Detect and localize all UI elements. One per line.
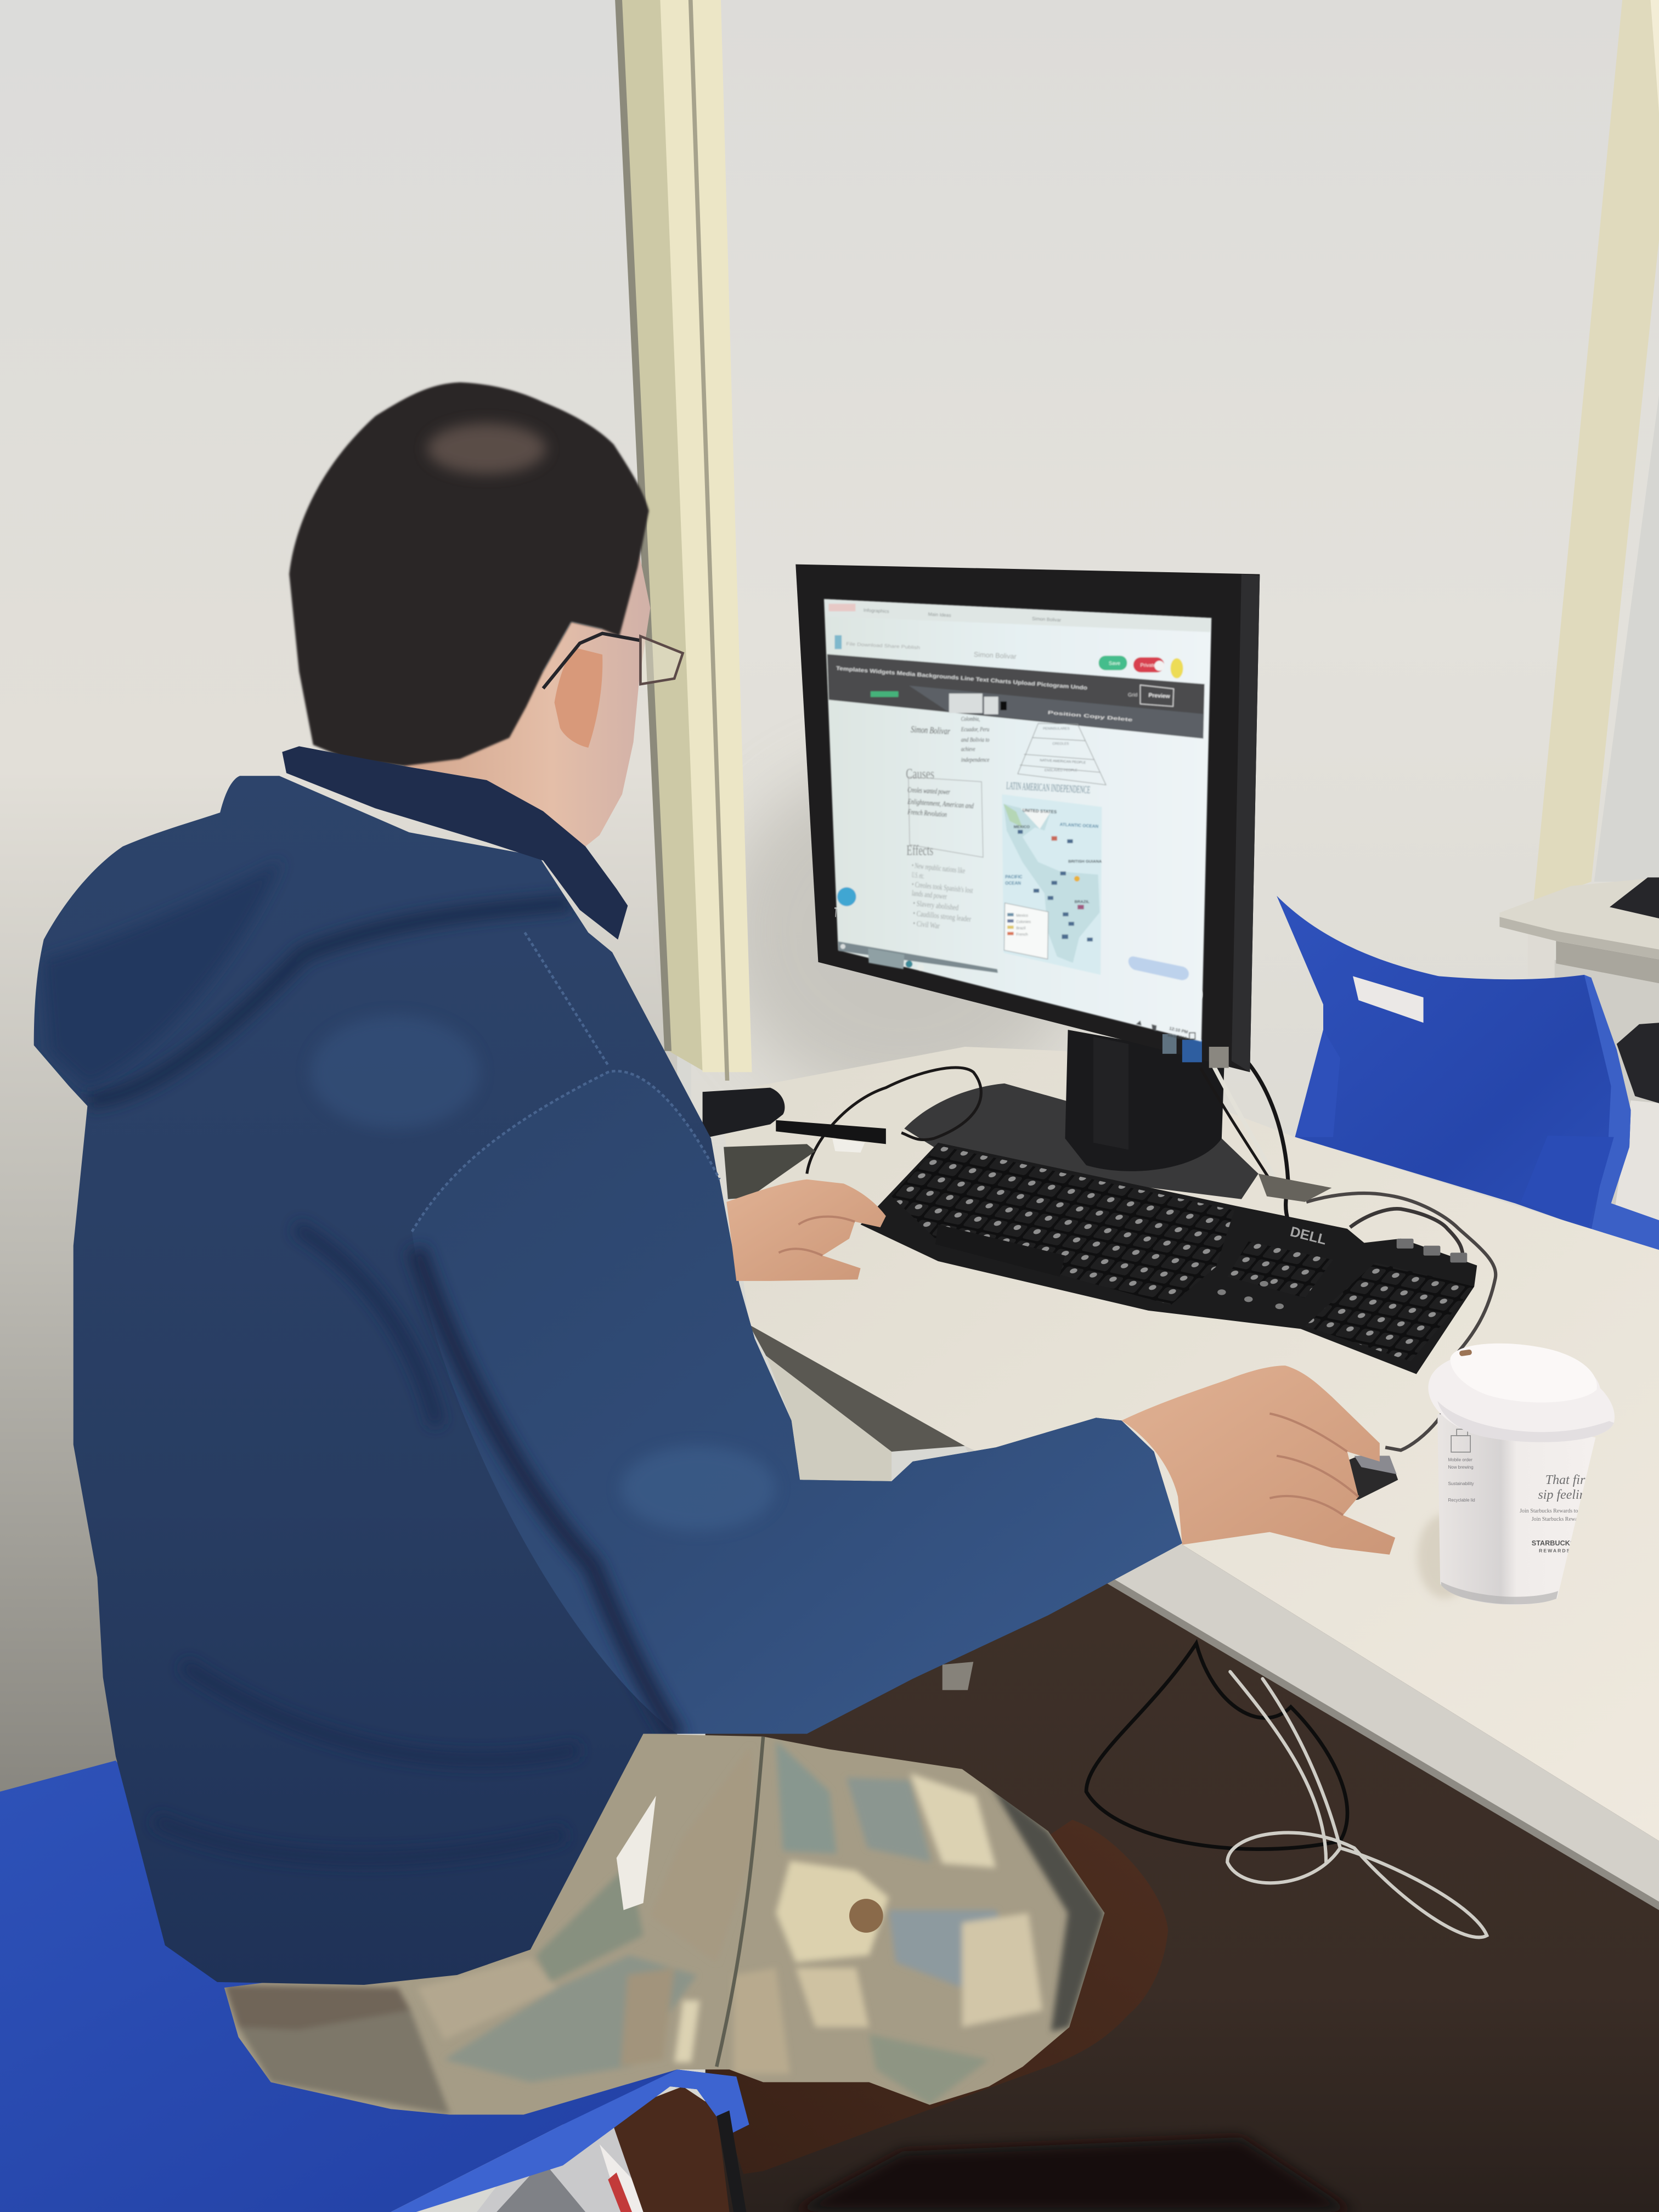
right door frame [1533, 0, 1659, 903]
effects bullet list: • New republic nations like [911, 861, 966, 876]
screen content [824, 599, 1211, 1042]
sneaker and sock [477, 2121, 663, 2212]
document text column left: Effects [906, 842, 933, 859]
pyramid diagram: CREOLES [1052, 742, 1069, 746]
camouflage shorts [212, 1721, 1114, 2123]
cup shadow [1418, 1514, 1472, 1598]
monitor bezel [795, 565, 1260, 1072]
monitor [795, 565, 1260, 1072]
monitor stand [904, 1030, 1259, 1199]
cup print: Join Starbucks Rewards [1532, 1516, 1584, 1522]
dark floor shadow [790, 2137, 1355, 2212]
editor toolbar: Preview [1148, 692, 1171, 700]
map legend: Mexico [1016, 914, 1028, 918]
document text column left: Simon Bolivar [911, 724, 951, 737]
DELL logo: DELL [1289, 1224, 1328, 1248]
app header: File Download Share Publish [846, 641, 921, 650]
cup print: Now brewing [1448, 1465, 1474, 1470]
shoulder seams [412, 933, 719, 1232]
coffee cup [1418, 1344, 1615, 1605]
screen background [824, 599, 1211, 1042]
cup print: That first [1545, 1473, 1595, 1487]
cup print: Join Starbucks Rewards today [1520, 1508, 1586, 1514]
pyramid diagram: ENSLAVED PEOPLE [1045, 769, 1077, 772]
navy hoodie [34, 776, 1182, 1985]
ear [555, 647, 602, 748]
effects bullet list: lands and power [911, 889, 947, 901]
document text column left: Ecuador, Peru [961, 726, 990, 733]
document text column left: independence [961, 757, 989, 764]
map of Latin America: ATLANTIC OCEAN [1059, 822, 1099, 829]
shoulder highlight [311, 1015, 479, 1128]
side table with keyboard [1499, 877, 1659, 1227]
white shirt hem [617, 1796, 656, 1910]
map of Latin America [1002, 794, 1102, 975]
app header: Save [1109, 661, 1120, 666]
map of Latin America: BRAZIL [1074, 899, 1090, 904]
app header: Private [1140, 662, 1156, 668]
editor toolbar: Templates Widgets Media Backgrounds Line Text Charts Upload Pictogram Undo [836, 665, 1087, 691]
map of Latin America: BRITISH GUIANA [1068, 859, 1102, 864]
document text column left: Creoles wanted power [907, 786, 951, 796]
system tray clock: 10/3/2019 [1167, 1032, 1188, 1041]
left hand on keyboard [726, 1180, 886, 1281]
system tray clock: 12:10 PM [1169, 1026, 1188, 1035]
map of Latin America: UNITED STATES [1023, 808, 1057, 815]
editor toolbar [827, 654, 1205, 738]
chair leg under arm [943, 1662, 973, 1690]
keyboard [861, 1143, 1477, 1374]
cup print: sip feeling [1538, 1488, 1593, 1502]
app header: Simon Bolivar [974, 651, 1017, 661]
cup print [1441, 1429, 1595, 1604]
cup body [1437, 1414, 1595, 1605]
effects bullet list [911, 861, 973, 930]
browser tabs [824, 599, 1211, 632]
share pill [1128, 956, 1189, 980]
map of Latin America: MEXICO [1014, 824, 1030, 829]
arrow keys [1217, 1281, 1284, 1309]
main key block [891, 1146, 1234, 1305]
under-desk cables [1086, 1644, 1487, 1937]
blue stool seat [0, 1760, 749, 2212]
document text column left: and Bolivia to [961, 737, 990, 743]
document text column left: Enlightenment, American and [907, 797, 974, 810]
cup print: Mobile order [1448, 1458, 1472, 1463]
effects bullet list: • Caudillos strong leader [912, 909, 972, 924]
door pillar [615, 0, 752, 1081]
cup print: Sustainability [1448, 1481, 1474, 1486]
shorts seam [716, 1736, 763, 2067]
pyramid diagram: PENINSULARES [1043, 727, 1070, 731]
cup lid [1428, 1344, 1615, 1442]
map of Latin America: PACIFIC [1005, 874, 1023, 879]
map of Latin America: OCEAN [1005, 881, 1021, 886]
effects bullet list: • Creoles took Spanish's lost [911, 880, 973, 895]
far lower leg [706, 1820, 1168, 2174]
hood lower shading [42, 861, 282, 1086]
monitor cables [807, 1057, 1496, 1450]
map legend: Brazil [1016, 927, 1026, 930]
wall shadow behind monitor [719, 762, 1086, 1101]
right wall [691, 0, 1659, 1269]
floor [706, 1484, 1659, 2212]
browser tabs: Main Ideas [928, 611, 951, 618]
map legend: French [1016, 933, 1028, 937]
left wall [0, 0, 677, 1834]
thinning crown [427, 423, 546, 474]
browser tabs: Infographics [864, 607, 889, 614]
effects bullet list: U.S. etc. [911, 871, 925, 881]
document text column left: French Revolution [907, 808, 947, 819]
number pad [1305, 1262, 1474, 1361]
document text column left [906, 716, 990, 859]
blue chair [1277, 896, 1659, 1250]
editor toolbar: Position Copy Delete [1047, 709, 1133, 723]
sleeve and body crease [416, 1249, 677, 1738]
navigation key cluster [1227, 1242, 1333, 1298]
eyeglasses [543, 634, 683, 689]
pyramid diagram: NATIVE AMERICAN PEOPLE [1040, 759, 1086, 765]
screen content: LATIN AMERICAN INDEPENDENCE [1006, 780, 1091, 796]
system tray clock [1136, 1020, 1195, 1041]
desk items: glasses case, adapter and phone [703, 1088, 886, 1199]
browser tabs: Simon Bolivar [1032, 616, 1062, 623]
polo collar [282, 746, 628, 940]
app header [834, 635, 1183, 679]
back fold creases [155, 1227, 578, 1859]
effects bullet list: • Slavery abolished [912, 899, 959, 912]
cargo pocket button [849, 1899, 883, 1933]
pyramid diagram [1018, 724, 1106, 785]
document text column left: Colombia, [961, 716, 980, 723]
monitor right edge [1232, 574, 1260, 1072]
chat bubble [837, 887, 856, 906]
taskbar [838, 941, 998, 973]
computer mouse [1291, 1456, 1398, 1506]
map legend: Colonies [1016, 921, 1031, 924]
right hand on mouse [1121, 1365, 1395, 1555]
hoodie torso [34, 776, 1182, 1985]
cup print: REWARDS [1539, 1548, 1571, 1553]
map legend [1004, 903, 1048, 959]
head [289, 382, 683, 847]
document text column left: achieve [961, 746, 975, 753]
editor toolbar: Grid [1128, 692, 1137, 697]
cup print: STARBUCKS [1532, 1539, 1575, 1547]
hair [289, 382, 649, 766]
hoodie shading clipped to the garment [42, 861, 776, 1859]
cup print: Recyclable lid [1448, 1498, 1475, 1503]
function keys [1397, 1239, 1467, 1262]
effects bullet list: • Civil War [912, 919, 940, 930]
under-desk wall [766, 1356, 891, 1484]
desk [719, 1047, 1659, 1910]
space bar [935, 1224, 1065, 1277]
sleeve highlight [620, 1446, 776, 1531]
sticker badges [1163, 1034, 1229, 1068]
hood hem shadow [87, 903, 571, 1101]
document text column left: Causes [906, 765, 934, 782]
neck and face [403, 553, 650, 847]
cable port plate [1259, 1173, 1331, 1202]
near lower leg [610, 2086, 729, 2212]
power button [1185, 986, 1202, 1003]
raised sleeve [412, 1071, 1182, 1734]
monitor: ThinkCentre [833, 905, 868, 923]
